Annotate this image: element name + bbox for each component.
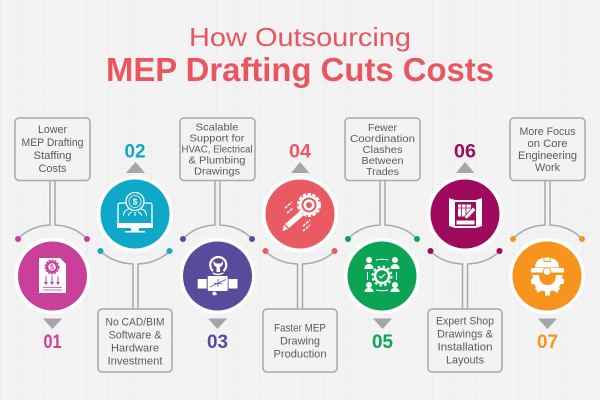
item 04: Faster MEP Drawing Production xyxy=(262,142,338,372)
text box 05: Between xyxy=(362,155,404,167)
icon circle 06: blueprint xyxy=(427,176,503,252)
text box 04: Production xyxy=(274,348,326,360)
text box 07: on Core xyxy=(528,138,568,150)
text box 05 xyxy=(345,118,420,180)
number 07: 07 xyxy=(537,332,558,353)
arrow 04 xyxy=(291,162,310,173)
connector 05 xyxy=(345,180,420,242)
connector 07 xyxy=(510,180,585,242)
text box 02: Investment xyxy=(108,356,162,368)
arrow 03 xyxy=(208,318,227,329)
text box 02: Hardware xyxy=(111,342,159,354)
text box 02: Software & xyxy=(108,330,162,342)
connector 06 xyxy=(428,248,502,309)
text box 03: Scalable xyxy=(196,121,239,133)
text box 05: Coordination xyxy=(350,133,415,145)
arrow 01 xyxy=(43,318,62,329)
text box 03 xyxy=(180,118,255,180)
text box 01: Lower xyxy=(38,124,67,136)
number 06: 06 xyxy=(454,142,476,162)
icon circle 02: monitor with dollar: $ xyxy=(133,196,138,206)
text box 03: & Plumbing xyxy=(188,154,246,166)
text box 01: Staffing xyxy=(34,150,72,162)
item 06: Expert Shop Drawings xyxy=(427,142,503,372)
connector 01 xyxy=(15,180,90,242)
text box 06: Installation xyxy=(438,342,492,354)
title: MEP Drafting Cuts Costs xyxy=(106,51,494,88)
text box 02: No CAD/BIM xyxy=(106,316,164,328)
text box 07: Work xyxy=(535,162,560,174)
text box 01: MEP Drafting xyxy=(22,137,84,149)
text box 01: Costs xyxy=(38,163,67,175)
arrow 07 xyxy=(538,318,557,329)
connector 03 xyxy=(180,180,255,242)
connector 02 xyxy=(98,248,172,309)
text box 03: HVAC, Electrical xyxy=(182,143,252,155)
item 01: Lower MEP Drafting Staffing Costs xyxy=(14,118,90,353)
text box 07 xyxy=(510,118,585,180)
text box 05: Trades xyxy=(366,166,399,178)
icon circle 02: monitor with dollar xyxy=(97,176,173,252)
text box 04: Faster MEP xyxy=(274,322,326,334)
item 07: More Focus on Core Engineering Work xyxy=(509,118,585,353)
text box 03: Drawings xyxy=(194,165,240,177)
icon circle 01: cost report xyxy=(14,238,90,314)
text box 01 xyxy=(15,118,90,180)
item 02: No CAD/BIM Software & Hardware Investment xyxy=(97,142,173,372)
icon circle 01: cost report: $ xyxy=(50,264,54,272)
title xyxy=(106,22,494,88)
arrow 02 xyxy=(126,162,145,173)
text box 05: Fewer xyxy=(368,122,397,134)
text box 05: Clashes xyxy=(362,144,402,156)
number 01: 01 xyxy=(44,332,62,353)
number 04: 04 xyxy=(289,142,311,162)
text box 03: Support for xyxy=(190,132,245,144)
number 03: 03 xyxy=(207,332,228,353)
item 05: Fewer Coordination Clashes xyxy=(344,118,420,353)
item 03: Scalable Support xyxy=(180,118,256,353)
title: How Outsourcing xyxy=(189,22,411,52)
connector 04 xyxy=(262,248,338,309)
number 05: 05 xyxy=(372,332,393,353)
icon circle 03: valve and wrench xyxy=(180,238,256,314)
text box 07: Engineering xyxy=(518,150,577,162)
text box 02 xyxy=(98,309,172,372)
icon circle 05: team around gear xyxy=(344,238,420,314)
text box 04: Drawing xyxy=(280,336,320,348)
text box 06: Layouts xyxy=(446,354,484,366)
arrow 06 xyxy=(456,162,474,173)
text box 06: Drawings & xyxy=(437,328,494,340)
text box 07: More Focus xyxy=(520,126,576,138)
arrow 05 xyxy=(373,318,392,329)
text box 06 xyxy=(428,309,502,372)
text box 06: Expert Shop xyxy=(436,316,494,328)
icon circle 04: gear and pencil xyxy=(262,176,338,252)
number 02: 02 xyxy=(124,142,146,162)
text box 04 xyxy=(263,309,337,372)
icon circle 07: engineer helmet and gear xyxy=(509,238,585,314)
